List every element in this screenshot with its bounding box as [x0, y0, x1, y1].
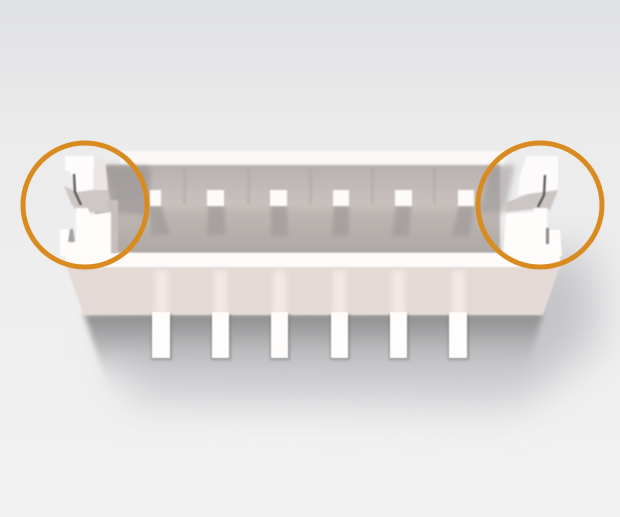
lower slit	[546, 228, 549, 244]
angled inner wall	[93, 156, 108, 191]
interior left corner shade	[105, 165, 150, 215]
slit	[74, 174, 81, 205]
upper block	[65, 156, 95, 192]
lower block	[60, 208, 111, 256]
inner rim wall	[518, 156, 558, 196]
interior back wall ribs	[183, 168, 436, 204]
pin tips	[150, 190, 474, 206]
interior well	[95, 165, 500, 253]
pin reflections on the front face	[155, 270, 465, 314]
right latch	[503, 156, 562, 256]
top rim	[120, 151, 505, 166]
lower pins	[151, 270, 469, 360]
grey wedge	[505, 190, 558, 212]
grey wedge	[64, 186, 112, 212]
pin shadows	[151, 314, 469, 360]
slit	[538, 175, 545, 207]
highlight circle: right latch	[478, 143, 602, 267]
highlight circle: left latch	[23, 143, 147, 267]
cast shadow around the connector	[110, 250, 600, 400]
upper pins inside the well	[150, 190, 474, 236]
shadow below the connector	[84, 314, 543, 392]
lower slit	[68, 229, 75, 242]
pin bodies	[152, 312, 467, 358]
left latch	[60, 156, 118, 256]
pin stems	[150, 206, 474, 236]
interior right corner shade	[478, 165, 515, 212]
connector body	[66, 151, 560, 315]
front top edge highlight	[66, 253, 560, 267]
lower block	[503, 208, 562, 256]
inner post	[108, 200, 118, 253]
front face	[66, 266, 560, 315]
